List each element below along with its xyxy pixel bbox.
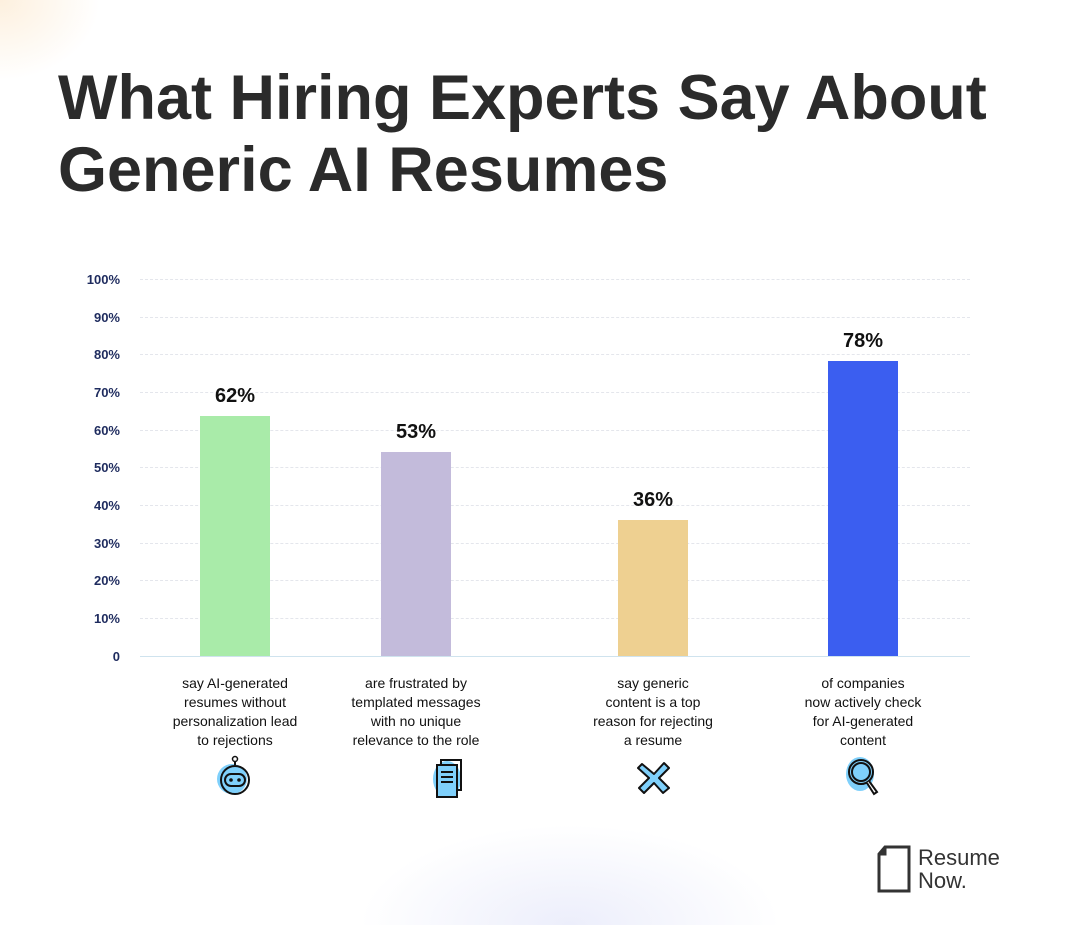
chart axes and grid: 70% [94, 385, 120, 400]
chart axes and grid: 50% [94, 460, 120, 475]
bar: 78% [828, 361, 898, 656]
chart axes and grid: 40% [94, 498, 120, 513]
value 53%: 53% [396, 421, 436, 443]
caption 4: now actively check [805, 694, 921, 710]
decorative glow bottom [360, 825, 780, 925]
caption 3: say generic [617, 675, 689, 691]
caption 2: relevance to the role [353, 732, 479, 748]
caption 4: content [840, 732, 886, 748]
caption 1: to rejections [197, 732, 273, 748]
chart axes and grid [87, 272, 970, 664]
caption 1: personalization lead [173, 713, 297, 729]
icon: cross [637, 762, 670, 794]
caption 4 [805, 675, 922, 748]
caption 2: with no unique [371, 713, 461, 729]
chart axes and grid: 60% [94, 423, 120, 438]
caption 3: reason for rejecting [593, 713, 713, 729]
title [58, 63, 987, 205]
chart axes and grid: 90% [94, 310, 120, 325]
caption 1: say AI-generated [182, 675, 288, 691]
caption 1: resumes without [184, 694, 286, 710]
chart axes and grid: 20% [94, 573, 120, 588]
chart axes and grid: 100% [87, 272, 120, 287]
title: Generic AI Resumes [58, 135, 668, 205]
chart axes and grid: 30% [94, 536, 120, 551]
caption 2 [351, 675, 481, 748]
caption 3: a resume [624, 732, 682, 748]
bar: 53% [381, 452, 451, 656]
icon: magnifier [846, 757, 878, 796]
caption 3: content is a top [606, 694, 700, 710]
chart axes and grid: 10% [94, 611, 120, 626]
value 36%: 36% [633, 489, 673, 511]
decorative glow top-left [0, 0, 100, 80]
logo: Resume [918, 845, 1000, 870]
caption 1 [173, 675, 297, 748]
bar: 62% [200, 416, 270, 656]
chart axes and grid: 0 [113, 649, 120, 664]
caption 2: templated messages [351, 694, 481, 710]
caption 3 [593, 675, 713, 748]
caption 4: for AI-generated [813, 713, 913, 729]
bar: 36% [618, 520, 688, 656]
logo: Now. [918, 868, 967, 893]
caption 2: are frustrated by [365, 675, 467, 691]
caption 4: of companies [821, 675, 905, 691]
value 62%: 62% [215, 385, 255, 407]
chart axes and grid: 80% [94, 347, 120, 362]
icon: robot [217, 756, 250, 795]
logo [878, 845, 1000, 893]
title: What Hiring Experts Say About [58, 63, 987, 133]
value 78%: 78% [843, 330, 883, 352]
icon: documents [433, 759, 462, 798]
